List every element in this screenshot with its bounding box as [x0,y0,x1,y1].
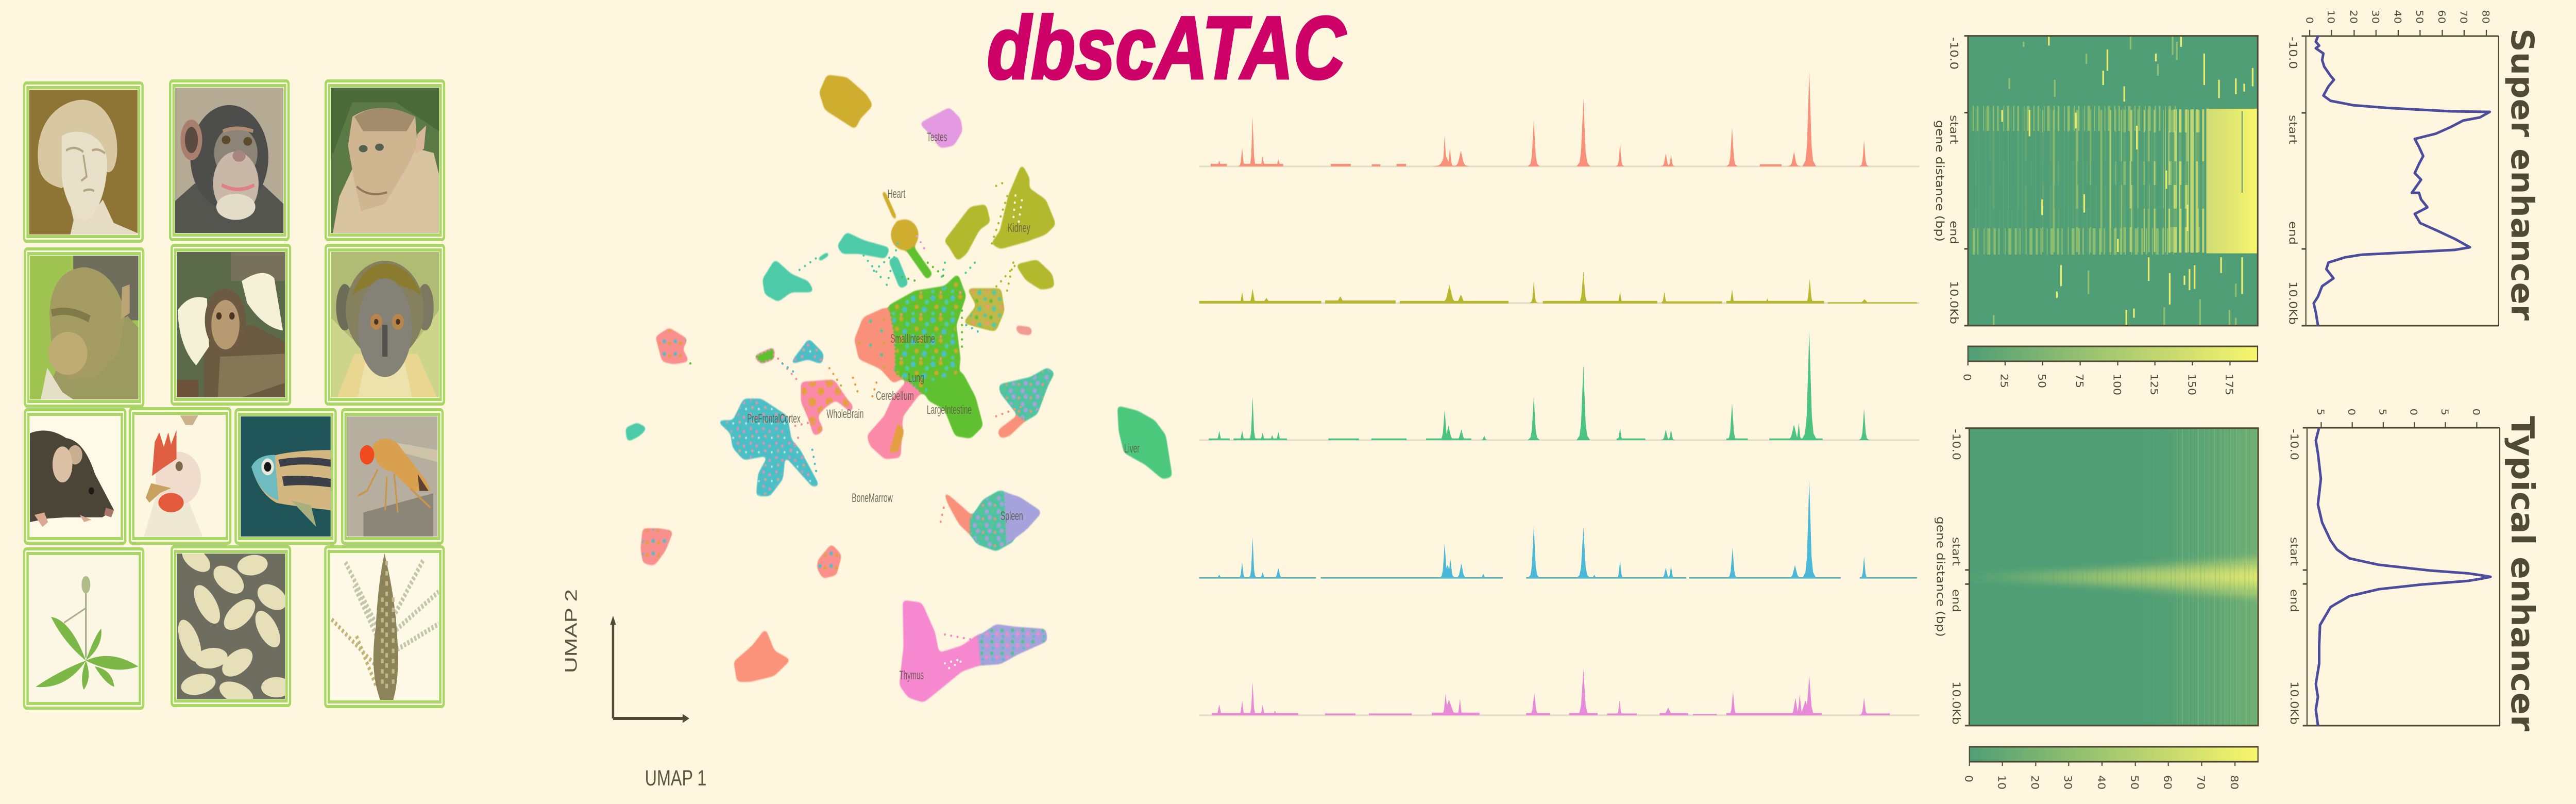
panel: UMAP scatter of tissues [562,76,1172,791]
photo tile: arabidopsis [24,549,143,708]
label: BoneMarrow: BoneMarrow [852,492,893,505]
photo tile: mouse [25,410,125,543]
cluster: thymus [900,601,984,702]
photo tile: marmoset [172,245,290,404]
cluster: heart [883,191,930,277]
typical enhancer profile plot: 5 [2377,409,2388,415]
super enhancer colorbar: 0 [1961,374,1973,381]
typical enhancer colorbar: 10 [1996,775,2007,790]
super enhancer profile plot: 60 [2436,10,2447,24]
label: Heart: Heart [887,188,905,201]
label: Cerebellum: Cerebellum [876,390,914,403]
cluster: bone marrow gold edge [889,424,904,452]
photo tile: rice panicle [325,547,444,707]
label: Lung: Lung [908,372,924,385]
super enhancer profile plot: 30 [2370,10,2381,24]
super enhancer profile plot: 40 [2392,10,2403,24]
typical enhancer profile plot: 0 [2470,409,2482,415]
cluster: salmon lobe [855,308,902,382]
photo tile: macaque [326,81,444,240]
title: dbscATAC [987,0,1347,97]
super enhancer profile plot: 20 [2348,10,2359,24]
typical enhancer profile plot [2287,409,2500,726]
super enhancer profile plot [2286,10,2499,326]
super enhancer colorbar: 100 [2111,374,2123,395]
typical enhancer heatmap axis labels [1934,429,1962,725]
typical enhancer colorbar: 60 [2162,775,2173,790]
cluster: kidney [945,165,1055,289]
cluster: upper left [656,328,688,363]
label: SmallIntestine: SmallIntestine [890,332,935,346]
label: LargeIntestine: LargeIntestine [927,404,972,417]
cluster: right mixed wedge [999,368,1054,421]
label: Liver: Liver [1124,442,1140,456]
photo tile: chicken [130,409,230,543]
track 3: green [1199,330,1919,441]
super enhancer profile plot: 80 [2480,10,2491,24]
typical enhancer heatmap axis labels: -10.0 [1950,429,1962,460]
cluster: teal blob [763,260,813,301]
super enhancer heatmap axis labels: start [1947,115,1960,144]
panel: species photo grid [24,81,444,709]
label: Kidney: Kidney [1008,222,1030,235]
super enhancer profile plot: 0 [2304,17,2315,24]
super enhancer colorbar: 75 [2074,374,2085,388]
arrow: UMAP axes [611,616,689,723]
track 4: blue [1199,480,1917,579]
typical enhancer heatmap axis labels: gene distance (bp) [1934,516,1946,637]
cluster: prefrontal cortex [718,399,819,495]
super enhancer colorbar [1961,346,2258,395]
typical enhancer colorbar: 70 [2195,775,2207,790]
cluster: spleen tail [944,492,975,536]
label: Testes: Testes [927,131,947,144]
super enhancer profile plot: -10.0 [2286,37,2299,69]
super enhancer heatmap axis labels: gene distance (bp) [1933,120,1946,242]
cluster: large intestine [928,373,982,438]
photo tile: zebrafish [235,410,335,543]
label: Thymus: Thymus [900,669,924,682]
cluster: right salmon wedge [998,416,1024,438]
scattered points [690,181,1022,671]
super enhancer heatmap axis labels [1933,37,1960,324]
track 2: olive [1199,271,1919,304]
photo tile: human statue [24,83,143,241]
super enhancer heatmap axis labels: end [1947,221,1960,244]
typical enhancer profile plot: 0 [2408,409,2419,415]
super enhancer heatmap axis labels: -10.0 [1947,37,1960,70]
axis label: UMAP 1: UMAP 1 [645,766,706,791]
super enhancer colorbar: 175 [2224,374,2235,395]
track 1: salmon [1199,71,1919,167]
typical enhancer profile plot: 10.0Kb [2287,681,2300,725]
photo tile: rhesus monkey [25,249,143,406]
cluster: small salmon [818,545,841,578]
cluster: bone marrow pink [868,378,926,458]
typical enhancer colorbar: 80 [2228,775,2240,790]
super enhancer colorbar: 125 [2148,374,2160,395]
typical enhancer colorbar: 50 [2129,775,2140,790]
cluster: liver [1118,407,1172,479]
heading: Super enhancer: Super enhancer [2504,28,2541,321]
typical enhancer profile plot: end [2287,589,2300,612]
typical enhancer colorbar: 40 [2095,775,2107,790]
label: Spleen: Spleen [1001,510,1023,523]
cluster: spleen purple [1005,493,1041,543]
photo tile: rice grains [172,542,292,709]
photo tile: vervet monkey [326,245,444,404]
cluster: gold top [820,76,872,128]
typical enhancer heatmap axis labels: start [1950,537,1962,566]
cluster: teal pink triangle [791,340,823,363]
super enhancer colorbar: 150 [2186,374,2197,395]
cluster: spleen [971,491,1013,550]
panel: genome signal tracks [1199,71,1919,716]
typical enhancer colorbar: 30 [2062,775,2074,790]
super enhancer colorbar: 50 [2036,374,2047,388]
photo tile: chimpanzee [170,81,289,240]
super enhancer profile plot: start [2286,115,2299,144]
cluster: right mixed [964,289,1004,331]
cluster: whole brain [802,380,853,435]
cluster: central mixed mass [889,275,965,397]
typical enhancer profile plot: 0 [2346,409,2357,415]
super enhancer profile plot: 70 [2458,10,2469,24]
cluster: lower left [641,529,672,565]
track 5: pink [1199,669,1919,716]
super enhancer profile plot: 50 [2414,10,2425,24]
axis label: UMAP 2: UMAP 2 [562,589,581,673]
typical enhancer profile plot: 5 [2315,409,2326,415]
cluster: testes [921,108,962,147]
super enhancer colorbar: 25 [1998,374,2010,388]
label: WholeBrain: WholeBrain [826,408,863,421]
typical enhancer colorbar: 20 [2029,775,2041,790]
cluster: teal arm [818,233,904,287]
super enhancer profile plot: end [2286,221,2299,245]
panel: super enhancer [1933,10,2541,395]
super enhancer heatmap [1964,36,2258,326]
typical enhancer heatmap axis labels: end [1950,589,1962,612]
photo tile: fruit fly [342,410,443,543]
typical enhancer colorbar [1963,747,2258,790]
typical enhancer heatmap [1965,428,2258,726]
typical enhancer colorbar: 0 [1963,775,1974,782]
typical enhancer profile plot: -10.0 [2287,429,2300,460]
scatter clusters [626,76,1172,702]
super enhancer heatmap axis labels: 10.0Kb [1947,281,1960,324]
cluster: small sliver [1014,325,1031,336]
heading: Typical enhancer: Typical enhancer [2504,416,2541,731]
typical enhancer heatmap axis labels: 10.0Kb [1950,681,1962,725]
super enhancer profile plot: 10.0Kb [2286,281,2299,325]
typical enhancer profile plot: start [2287,537,2300,566]
typical enhancer profile plot: 5 [2439,409,2450,415]
cluster: small green pink [755,347,774,363]
cluster: bottom salmon [735,630,790,681]
cluster: thymus mixed arm [978,625,1047,665]
super enhancer profile plot: 10 [2325,10,2336,24]
cluster: tiny teal [626,424,647,441]
panel: typical enhancer [1934,409,2541,790]
label: PreFrontalCortex: PreFrontalCortex [747,412,801,426]
